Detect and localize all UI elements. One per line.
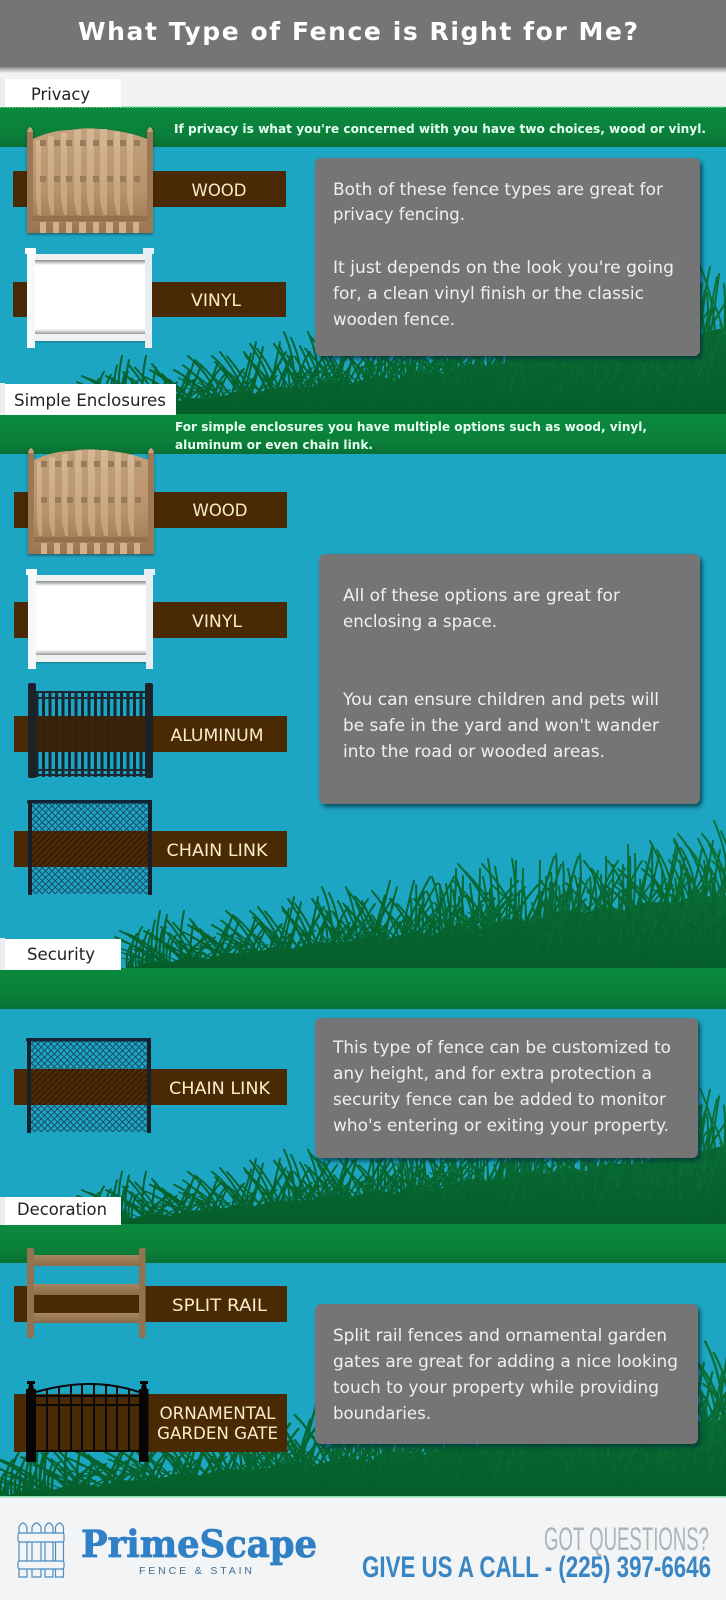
split rail row bbox=[14, 1248, 287, 1338]
intro text: simple enclosures: aluminum or even chain link. bbox=[175, 437, 373, 452]
intro text: simple enclosures bbox=[175, 419, 647, 452]
text panel: simple enclosures: be safe in the yard and won't wander bbox=[343, 716, 659, 736]
chain link row bbox=[14, 800, 287, 895]
text panel: privacy: Both of these fence types are great for bbox=[333, 180, 663, 200]
chain link row: CHAIN LINK bbox=[169, 1079, 271, 1099]
tab: security bbox=[0, 938, 121, 970]
section: decoration bbox=[0, 1197, 726, 1497]
grass: simple enclosures bbox=[111, 821, 726, 969]
title: What Type of Fence is Right for Me? bbox=[78, 17, 638, 46]
vinyl row: VINYL bbox=[192, 612, 243, 632]
tab: privacy: Privacy bbox=[31, 85, 90, 105]
wood row bbox=[14, 448, 287, 554]
aluminum row: ALUMINUM bbox=[170, 726, 264, 746]
grass: security bbox=[73, 1089, 726, 1225]
footer bbox=[0, 1496, 726, 1600]
text panel: decoration bbox=[315, 1304, 698, 1444]
logo icon: fence bbox=[18, 1523, 64, 1577]
tab: decoration: Decoration bbox=[17, 1200, 107, 1220]
intro text: simple enclosures: For simple enclosures you have multiple options such as wood, vinyl, bbox=[175, 419, 647, 434]
intro text: privacy: If privacy is what you're concerned with you have two choices, wood or vinyl. bbox=[174, 121, 706, 136]
text panel: privacy: wooden fence. bbox=[333, 310, 455, 330]
section: security bbox=[0, 938, 726, 1225]
chain link row bbox=[14, 1038, 287, 1133]
tab: simple enclosures bbox=[0, 383, 176, 415]
grass: privacy bbox=[73, 266, 726, 414]
tab: simple enclosures: Simple Enclosures bbox=[14, 391, 166, 411]
text panel: simple enclosures: You can ensure children and pets will bbox=[342, 690, 659, 710]
wood row: WOOD bbox=[192, 181, 246, 201]
ornamental garden gate row: ORNAMENTAL bbox=[160, 1404, 276, 1424]
grass: decoration bbox=[0, 1342, 726, 1497]
tab: decoration bbox=[0, 1197, 121, 1225]
aluminum row bbox=[14, 683, 287, 778]
section: simple enclosures bbox=[0, 383, 726, 969]
text panel: decoration: Split rail fences and ornamental garden bbox=[333, 1326, 667, 1346]
text panel: security: This type of fence can be customized to bbox=[332, 1038, 671, 1058]
section: privacy bbox=[0, 79, 726, 414]
ornamental garden gate row bbox=[14, 1381, 287, 1462]
tab: privacy bbox=[0, 79, 121, 107]
text panel: privacy: for, a clean vinyl finish or the classic bbox=[333, 284, 644, 304]
header bar bbox=[0, 0, 726, 107]
vinyl row: VINYL bbox=[191, 291, 242, 311]
grass edge: privacy bbox=[0, 106, 726, 108]
text panel: privacy bbox=[315, 158, 700, 356]
ornamental garden gate row: GARDEN GATE bbox=[157, 1424, 278, 1444]
tab: security: Security bbox=[27, 945, 95, 965]
split rail row: SPLIT RAIL bbox=[172, 1296, 268, 1316]
green band: decoration bbox=[0, 1224, 726, 1263]
green band: security bbox=[0, 968, 726, 1009]
vinyl row bbox=[13, 248, 286, 348]
text panel: decoration: gates are great for adding a nice looking bbox=[333, 1352, 678, 1372]
green band: privacy bbox=[0, 107, 726, 147]
logo tagline: FENCE & STAIN bbox=[139, 1565, 252, 1577]
text panel: security: any height, and for extra protection a bbox=[333, 1064, 652, 1084]
wood row: WOOD bbox=[192, 501, 248, 521]
text panel: simple enclosures: into the road or wooded areas. bbox=[343, 742, 605, 762]
text panel: decoration: touch to your property while providing bbox=[333, 1378, 659, 1398]
text panel: decoration: boundaries. bbox=[333, 1404, 431, 1424]
green band: simple enclosures bbox=[0, 414, 726, 454]
wood row bbox=[13, 127, 286, 233]
text panel: security: who's entering or exiting your property. bbox=[333, 1116, 669, 1136]
text panel: security bbox=[315, 1018, 698, 1158]
text panel: simple enclosures bbox=[319, 554, 700, 804]
text panel: simple enclosures: enclosing a space. bbox=[343, 612, 497, 632]
text panel: privacy: It just depends on the look you're going bbox=[333, 258, 674, 278]
logo wordmark: PrimeScape bbox=[81, 1522, 317, 1566]
chain link row: CHAIN LINK bbox=[166, 841, 268, 861]
text panel: security: security fence can be added to monitor bbox=[333, 1090, 666, 1110]
vinyl row bbox=[14, 569, 287, 669]
text panel: simple enclosures: All of these options are great for bbox=[343, 586, 620, 606]
text panel: privacy: privacy fencing. bbox=[333, 205, 465, 225]
